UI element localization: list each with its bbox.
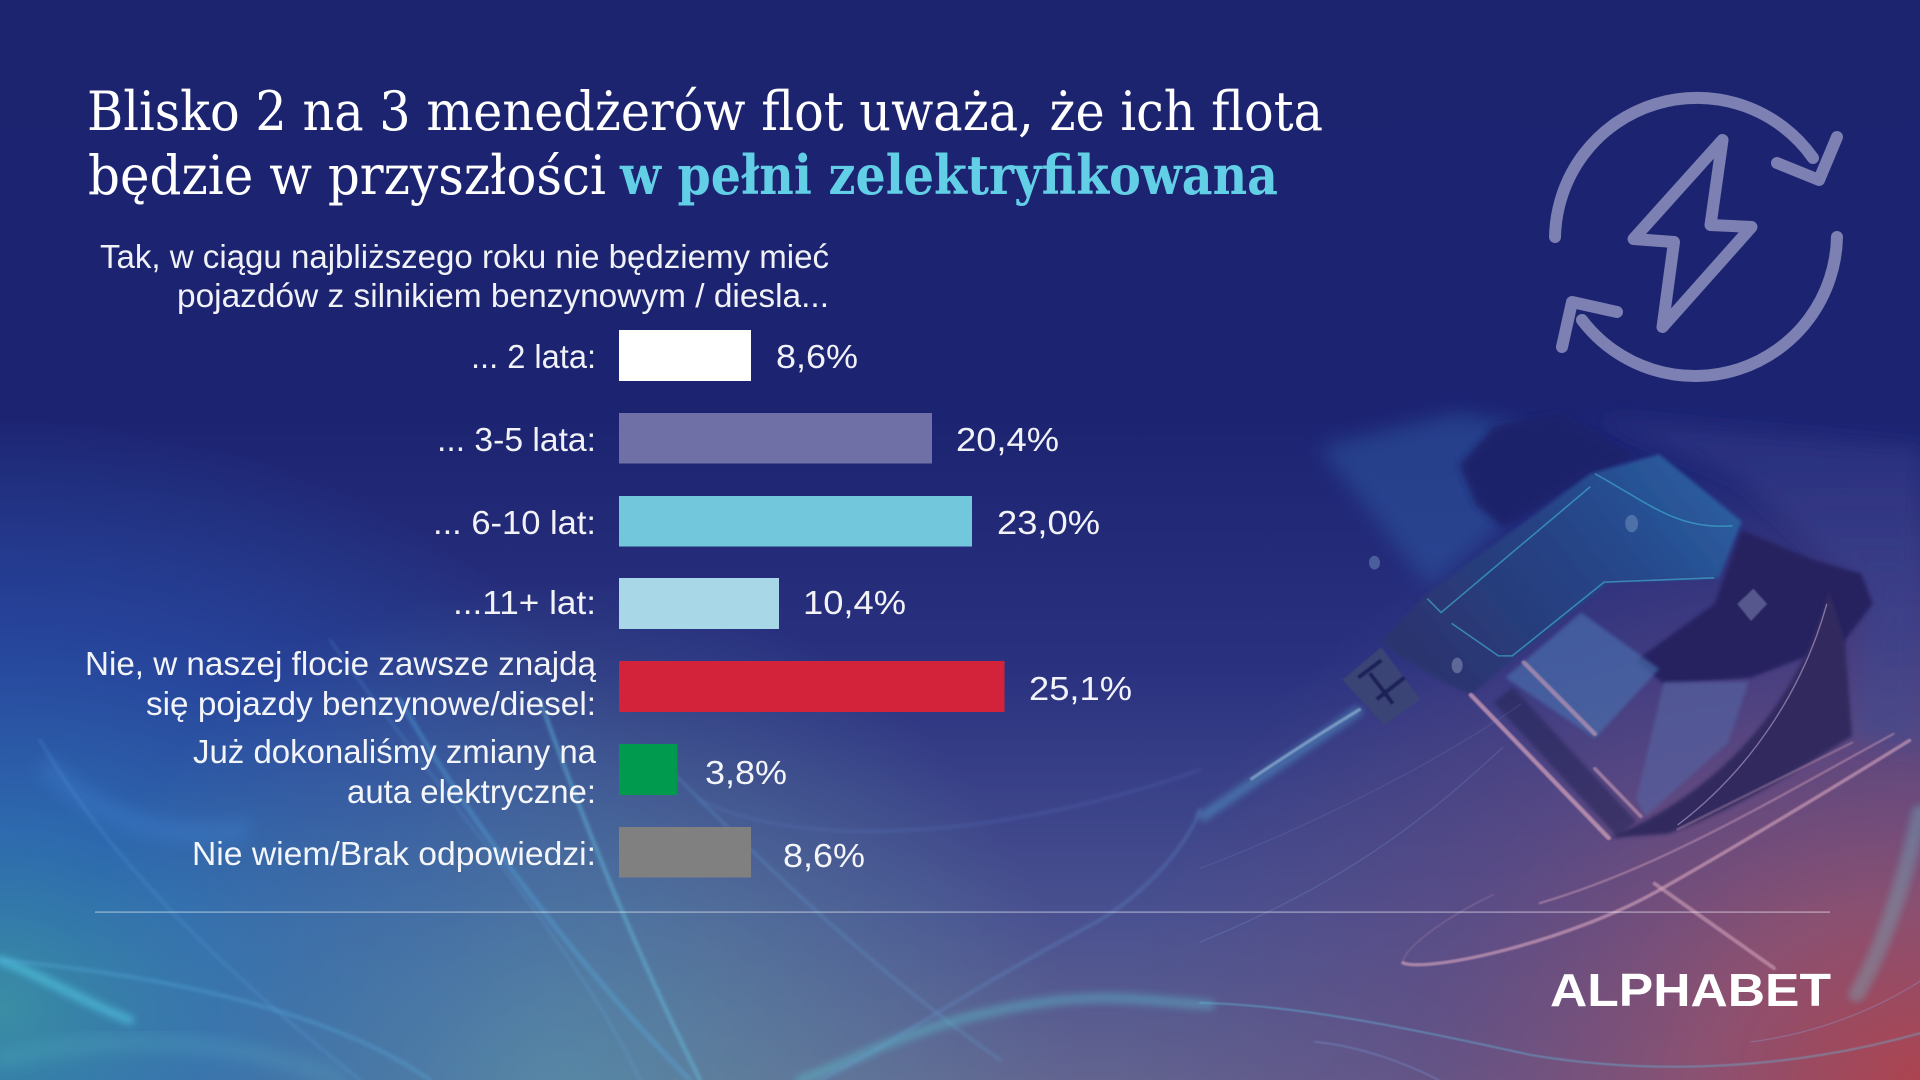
row: 11+ lat: ...11+ lat: xyxy=(453,584,596,621)
light car panel left of the charger xyxy=(1319,413,1521,586)
large arc hints xyxy=(1200,704,1521,942)
row: 2 lata: ... 2 lata: xyxy=(471,338,596,375)
row: auta elektryczne: 3,8% xyxy=(705,754,787,791)
dark charging port recess xyxy=(1459,413,1636,528)
row: zawsze benzynowe/diesel: Nie, w naszej flocie zawsze znajdą xyxy=(85,645,597,682)
title: Blisko 2 na 3 menedżerów flot uważa, że ich flota xyxy=(87,80,1323,143)
chart subtitle xyxy=(100,238,829,314)
row: 11+ lat: 10,4% xyxy=(803,584,906,621)
bar chart xyxy=(85,330,1132,878)
row: brak odpowiedzi: 8,6% xyxy=(783,837,865,874)
row: 3-5 lata: ... 3-5 lata: xyxy=(437,421,596,458)
row: auta elektryczne: Już dokonaliśmy zmiany na xyxy=(193,733,597,770)
row: zawsze benzynowe/diesel: się pojazdy benzynowe/diesel: xyxy=(146,685,596,722)
row: 6-10 lat xyxy=(433,496,1100,546)
title: w pełni zelektryfikowana xyxy=(619,143,1278,207)
row: 2 lata xyxy=(471,330,858,381)
chart subtitle: pojazdów z silnikiem benzynowym / diesla... xyxy=(177,277,829,314)
row: brak odpowiedzi: Nie wiem/Brak odpowiedzi: xyxy=(192,835,596,872)
title: będzie w przyszłości xyxy=(88,144,606,207)
logo: ALPHABET: ALPHABET xyxy=(1550,964,1831,1016)
cyan handle outlines xyxy=(1427,474,1733,656)
connector grip xyxy=(1342,647,1420,725)
dark curved clip xyxy=(1609,591,1852,838)
row: 6-10 lat: 23,0% xyxy=(997,504,1100,541)
row: auta elektryczne: auta elektryczne: xyxy=(347,773,596,810)
port socket dark area xyxy=(1636,530,1873,684)
background light wisps xyxy=(0,640,1210,1080)
socket detail xyxy=(1737,589,1767,621)
row: 11+ lat xyxy=(453,578,906,629)
glass wedge xyxy=(1505,613,1659,738)
charger handle xyxy=(1381,454,1742,695)
pink stripes xyxy=(1403,662,1909,968)
right car panel xyxy=(1595,417,1920,747)
background photo: EV charger xyxy=(1200,413,1920,1080)
row: zawsze benzynowe/diesel: 25,1% xyxy=(1029,670,1132,707)
title xyxy=(87,80,1323,207)
row: 3-5 lata: 20,4% xyxy=(956,421,1059,458)
row: 3-5 lata xyxy=(437,413,1059,464)
row: auta elektryczne xyxy=(193,733,787,810)
row: zawsze benzynowe/diesel xyxy=(85,645,1132,722)
dark diagonal stripes xyxy=(1503,695,1627,829)
row: 2 lata: 8,6% xyxy=(776,338,858,375)
icon: lightning bolt in circular arrows xyxy=(1555,98,1837,376)
row: 6-10 lat: ... 6-10 lat: xyxy=(433,504,596,541)
row: brak odpowiedzi xyxy=(192,827,865,878)
cable xyxy=(1200,709,1361,819)
chart subtitle: Tak, w ciągu najbliższego roku nie będziemy mieć xyxy=(100,238,829,275)
right glow strokes xyxy=(1200,812,1920,1080)
